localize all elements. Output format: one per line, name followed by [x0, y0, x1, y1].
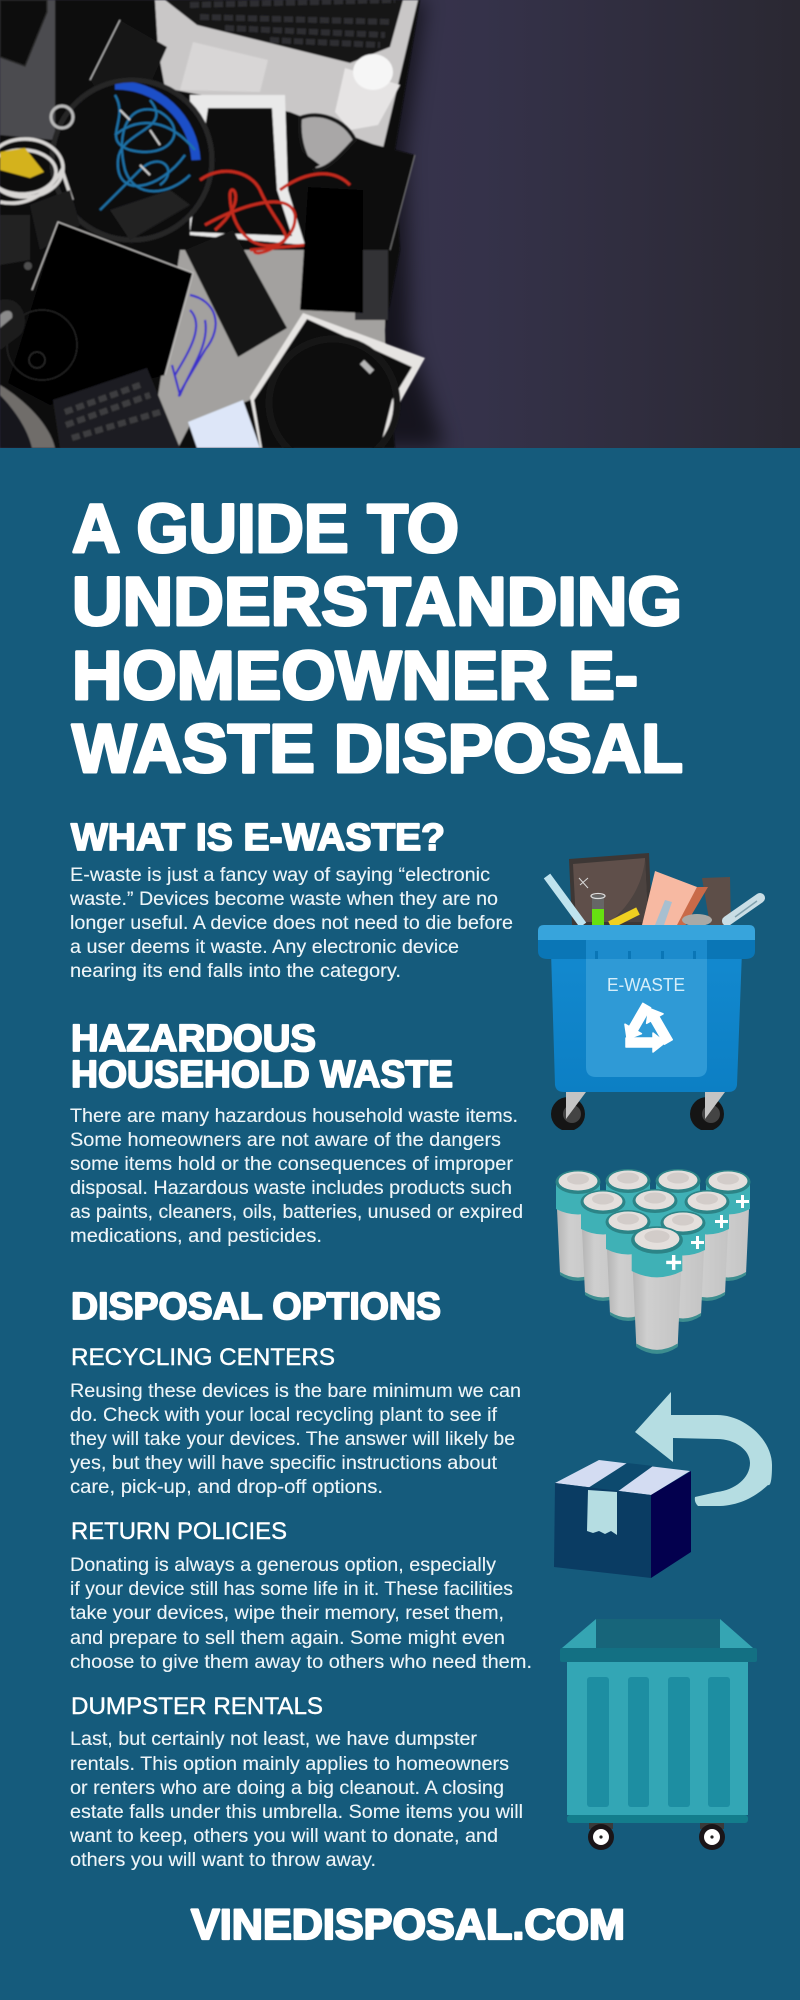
heading: DISPOSAL OPTIONS	[71, 1286, 441, 1328]
lid	[560, 1619, 757, 1662]
box	[554, 1460, 691, 1578]
body text: and prepare to sell them again. Some might even	[70, 1628, 505, 1649]
subsection: dumpster rentals	[69, 1693, 523, 1871]
body text: Some homeowners are not aware of the dangers	[70, 1130, 501, 1151]
body text: or renters who are doing a big cleanout. A closing	[70, 1778, 504, 1799]
subheading: DUMPSTER RENTALS	[71, 1693, 323, 1720]
body text: rentals. This option mainly applies to homeowners	[70, 1754, 509, 1775]
label: E-WASTE	[607, 975, 685, 995]
photo: pile of old electronics	[0, 0, 800, 467]
icon: dumpster	[560, 1619, 757, 1850]
body text: nearing its end falls into the category.	[70, 961, 401, 982]
heading: HAZARDOUS	[71, 1018, 316, 1060]
body text: E-waste is just a fancy way of saying “electronic	[70, 865, 490, 886]
body text: as paints, cleaners, oils, batteries, unused or expired	[70, 1202, 523, 1223]
heading	[71, 1018, 453, 1096]
icon: return box with arrow	[554, 1392, 772, 1578]
wheels	[588, 1823, 725, 1850]
container	[567, 1662, 748, 1823]
title: A GUIDE TO	[72, 490, 459, 567]
icon: batteries	[556, 1169, 750, 1354]
body text: Donating is always a generous option, especially	[70, 1555, 497, 1576]
title: UNDERSTANDING	[72, 563, 682, 640]
legs and wheels	[551, 1092, 725, 1131]
body text	[69, 1729, 523, 1871]
body text	[70, 1381, 521, 1498]
subsection: recycling centers	[70, 1344, 521, 1498]
title: HOMEOWNER E-	[72, 637, 638, 714]
bin contents	[547, 853, 760, 926]
subsection: return policies	[70, 1518, 532, 1673]
front panel	[586, 940, 707, 1077]
recycle symbol	[619, 1001, 677, 1052]
body text: estate falls under this umbrella. Some items you will	[70, 1802, 523, 1823]
body text: others you will want to throw away.	[70, 1850, 376, 1871]
body text: medications, and pesticides.	[70, 1226, 322, 1247]
section: hazardous household waste	[70, 1018, 523, 1247]
body text	[70, 1106, 523, 1247]
title: WASTE DISPOSAL	[72, 710, 683, 787]
body text: There are many hazardous household waste items.	[70, 1106, 518, 1127]
body text: a user deems it waste. Any electronic device	[70, 937, 459, 958]
body text: disposal. Hazardous waste includes products such	[70, 1178, 512, 1199]
body text	[69, 865, 513, 982]
body text: want to keep, others you will want to donate, and	[69, 1826, 498, 1847]
subheading: RETURN POLICIES	[71, 1518, 287, 1545]
icon: e-waste bin	[538, 853, 760, 1131]
body text: waste.” Devices become waste when they are no	[69, 889, 498, 910]
heading: HOUSEHOLD WASTE	[71, 1054, 453, 1096]
body text: Last, but certainly not least, we have dumpster	[70, 1729, 478, 1750]
heading: WHAT IS E-WASTE?	[71, 817, 445, 859]
lid	[538, 925, 755, 959]
body text: do. Check with your local recycling plant to see if	[70, 1405, 498, 1426]
body text: choose to give them away to others who need them.	[70, 1652, 532, 1673]
section: disposal options	[69, 1286, 532, 1871]
body text: they will take your devices. The answer will likely be	[70, 1429, 515, 1450]
bin body	[551, 951, 742, 1092]
body text: if your device still has some life in it. These facilities	[70, 1579, 513, 1600]
body text: care, pick-up, and drop-off options.	[70, 1477, 383, 1498]
body text: Reusing these devices is the bare minimum we can	[70, 1381, 521, 1402]
body text: take your devices, wipe their memory, reset them,	[70, 1603, 504, 1624]
title	[72, 490, 683, 787]
body text: some items hold or the consequences of improper	[70, 1154, 514, 1175]
body text: longer useful. A device does not need to die before	[70, 913, 513, 934]
return arrow	[635, 1392, 772, 1506]
body text: yes, but they will have specific instructions about	[70, 1453, 498, 1474]
subheading: RECYCLING CENTERS	[71, 1344, 335, 1371]
body text	[70, 1555, 532, 1673]
section: what is e-waste	[69, 817, 513, 982]
footer website: VINEDISPOSAL.COM	[191, 1901, 625, 1949]
